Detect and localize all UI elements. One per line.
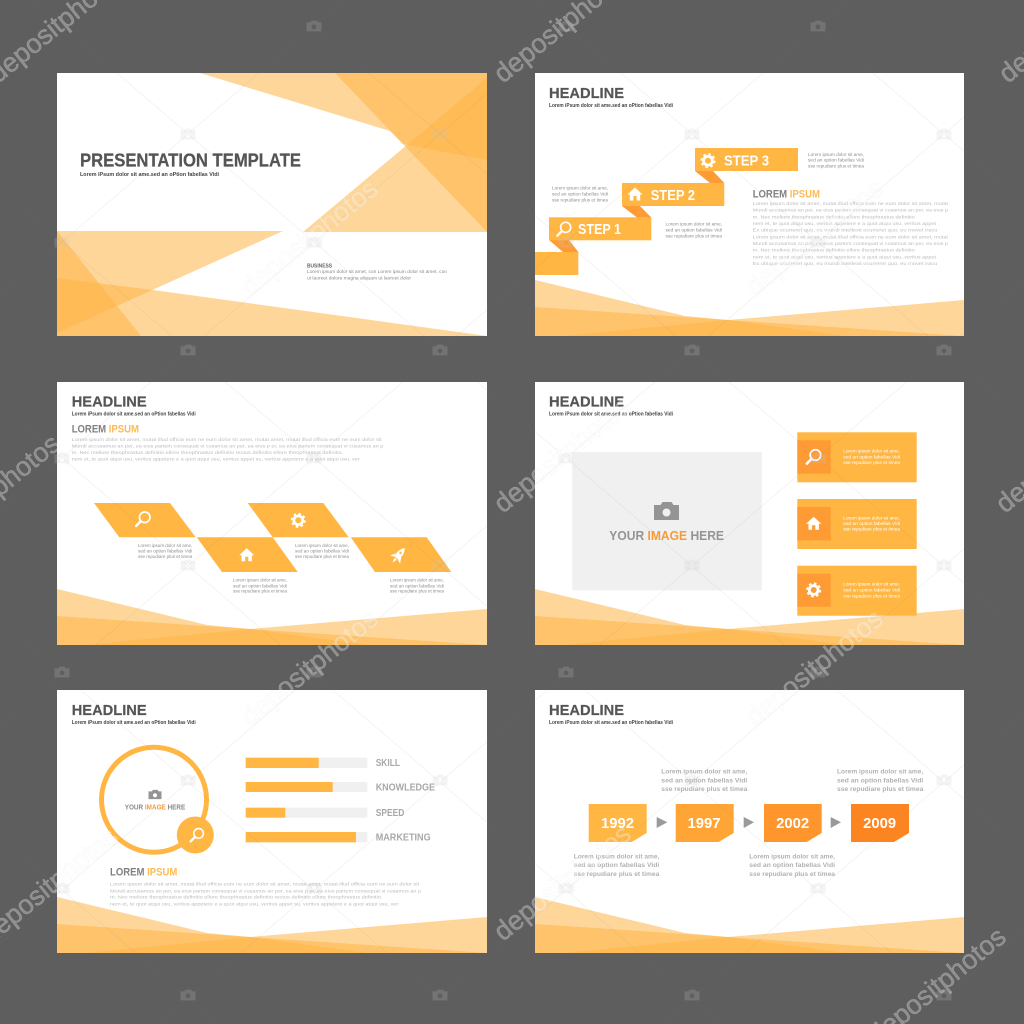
caption 2: sse repudiare plus et timea — [233, 589, 287, 594]
card: search — [797, 432, 917, 482]
paragraph: Lorem ipsum dolor sit amet, mutat illud officia eum ne eum dolor sit amet, mutat amet, mutat illud officia eum ne eum dolor sit — [72, 437, 382, 443]
caption 2002: sed an option fabellas Vidi — [749, 862, 835, 869]
step 1 — [549, 217, 651, 240]
card: search: Lorem ipsum dolor sit ame, — [843, 449, 900, 454]
heading: HEADLINE — [549, 702, 624, 719]
watermark text: depositphotos — [235, 173, 384, 302]
caption 1992 — [574, 853, 660, 878]
card: home: sse repudiare plus et timea — [843, 527, 900, 532]
watermark text: depositphotos — [488, 818, 637, 947]
step 1: STEP 1 — [578, 222, 621, 238]
watermark text: depositphotos — [740, 603, 889, 732]
card: home: sed an option fabellas Vidi — [843, 521, 900, 526]
bar: skill: SKILL — [376, 758, 400, 769]
bar: skill — [246, 758, 400, 769]
subheading: Lorem iPsum dolor sit ame.sed an oPtion fabellas Vidi — [72, 411, 196, 417]
caption 3 — [295, 543, 349, 559]
paragraph: nem et, te quot atqui usu, veritus appetere e a quot atqui usu, veritus appet su, veritus appetere e a quot atqui usu, ver — [110, 901, 399, 907]
paragraph: m. Nec meliore theophrastus definitio ellore theophrastus definitio — [753, 214, 915, 220]
caption 2009: Lorem ipsum dolor sit ame, — [837, 769, 923, 776]
paragraph: nem et, te quot atqui usu, veritus appetere e a quot atqui usu, veritus appet su, veritus appetere e a quot atqui usu, ver — [72, 457, 360, 463]
year 2009 — [851, 804, 909, 842]
business text: BUSINESS — [307, 264, 332, 270]
bottom wave — [57, 897, 487, 953]
caption 3: Lorem ipsum dolor sit ame, — [295, 543, 349, 548]
caption 2: sed an option fabellas Vidi — [233, 583, 287, 588]
step 3 caption — [808, 152, 864, 168]
paragraph: Lorem ipsum dolor sit amet, mutat illud officia eum ne eum dolor sit amet, mutat — [753, 201, 949, 207]
caption 2002: Lorem ipsum dolor sit ame, — [749, 853, 835, 860]
paragraph: Mundi accusamus an per, ea eius partem consequat vi cusamus an per, ea eius p er, ea eius partem consequat vi cusamus an p — [110, 888, 421, 894]
heading: HEADLINE — [549, 394, 624, 410]
arrow — [831, 817, 841, 828]
paragraph: nem et, te quot atqui usu, veritus appetere e a quot atqui usu, veritus appet — [753, 221, 937, 227]
heading: HEADLINE — [549, 85, 624, 102]
step 1 caption: sse repudiare plus et timea — [666, 233, 722, 238]
watermark text: depositphotos — [740, 173, 889, 302]
paragraph: Mundi accusamus an per, ea eius partem consequat vi cusamus an per, ea eius p — [753, 241, 948, 247]
paragraph: Mundi accusamus an per, ea eius partem consequat vi cusamus an per, ea eius p er, ea eius partem consequat vi cusamus an p — [72, 444, 384, 450]
year 1997: 1997 — [688, 816, 720, 832]
caption 4: sse repudiare plus et timea — [390, 589, 444, 594]
caption 1997: sed an option fabellas Vidi — [661, 777, 747, 784]
heading: HEADLINE — [72, 702, 147, 719]
paragraph: Mundi accusamus an per, ea eius partem consequat vi cusamus an per, ea eius p — [753, 208, 948, 214]
business text — [307, 264, 447, 282]
panel: parallelogram slide — [57, 382, 487, 645]
step 2 caption: sed an option fabellas Vidi — [552, 192, 608, 196]
card: gear — [797, 566, 917, 616]
image circle: YOUR IMAGE HERE — [125, 805, 186, 812]
year 1997 — [676, 804, 734, 842]
caption 1 — [138, 543, 193, 559]
bottom wave — [57, 589, 487, 645]
arrow — [744, 817, 754, 828]
bar: speed — [246, 808, 404, 819]
watermark text: depositphotos — [488, 390, 637, 519]
lorem ipsum heading: LOREM IPSUM — [110, 867, 177, 879]
paragraph — [753, 201, 949, 267]
step 1 caption: Lorem ipsum dolor sit ame, — [666, 222, 722, 227]
step 3 caption: sed an option fabellas Vidi — [808, 158, 864, 163]
block: gear — [248, 503, 349, 537]
step 2 — [622, 183, 724, 206]
bar: marketing — [246, 832, 431, 844]
bottom wave — [535, 280, 964, 336]
ribbon base — [535, 252, 578, 275]
step 3 — [695, 148, 798, 171]
paragraph: Ex ubique ocurreret quo, eu mundi intellexit ocurreret quo, eu movet iracu — [753, 261, 938, 267]
step 1 caption — [666, 222, 722, 238]
caption 2009: sse repudiare plus et timea — [837, 786, 924, 793]
caption 3: sed an option fabellas Vidi — [295, 549, 349, 554]
caption 1: Lorem ipsum dolor sit ame, — [138, 543, 192, 548]
bottom left triangles — [57, 231, 487, 336]
image placeholder — [572, 452, 762, 590]
image circle — [102, 747, 206, 852]
step 3 caption: Lorem ipsum dolor sit ame, — [808, 152, 864, 157]
lorem ipsum heading: LOREM IPSUM — [753, 188, 820, 200]
paragraph: m. Nec meliore theophrastus definitio ellore theophrastus definitio rectus definitio ellore theophrastus definitio — [110, 895, 381, 901]
caption 1: sse repudiare plus et timea — [138, 554, 193, 559]
panel: cover slide — [57, 73, 487, 336]
image placeholder: YOUR IMAGE HERE — [609, 528, 724, 543]
step 2 caption: sse repudiare plus et timea — [552, 198, 608, 202]
step 3 caption: sse repudiare plus et timea — [808, 163, 864, 168]
year 1992 — [589, 804, 647, 842]
card: home: Lorem ipsum dolor sit ame, — [843, 515, 900, 520]
block: home — [197, 537, 298, 572]
step 2 caption — [552, 186, 608, 202]
caption 1997: sse repudiare plus et timea — [661, 786, 748, 793]
year 1992: 1992 — [601, 816, 634, 832]
card: gear: sse repudiare plus et timea — [843, 593, 900, 598]
caption 2002: sse repudiare plus et timea — [749, 871, 835, 878]
card: search: sse repudiare plus et timea — [843, 460, 900, 465]
ribbon folds — [549, 171, 724, 252]
card: search: sed an option fabellas Vidi — [843, 454, 900, 459]
step 2: STEP 2 — [651, 188, 695, 204]
step 2 caption: Lorem ipsum dolor sit ame, — [552, 186, 608, 191]
caption 1992: sse repudiare plus et timea — [574, 871, 660, 878]
lorem ipsum heading: LOREM IPSUM — [72, 424, 139, 436]
bar: marketing: MARKETING — [376, 833, 431, 844]
subheading: Lorem iPsum dolor sit ame.sed an oPtion fabellas Vidi — [549, 720, 674, 726]
paragraph: Ex ubique ocurreret quo, eu mundi intellexit ocurreret quo, eu movet iracu — [753, 228, 938, 234]
year 2002 — [764, 804, 822, 842]
bottom wave — [535, 897, 964, 953]
caption 1997: Lorem ipsum dolor sit ame, — [661, 769, 747, 776]
caption 3: sse repudiare plus et timea — [295, 554, 349, 559]
paragraph: Lorem ipsum dolor sit amet, mutat illud officia eum ne eum dolor sit amet, mutat — [753, 234, 949, 240]
subheading: Lorem iPsum dolor sit ame.sed an oPtion fabellas Vidi — [549, 103, 674, 109]
paragraph: nem et, te quot atqui usu, veritus appetere e a quot atqui usu, veritus appet — [753, 254, 937, 260]
bar: speed: SPEED — [376, 808, 404, 819]
card: home — [797, 499, 917, 549]
paragraph: m. Nec meliore theophrastus definitio ellore theophrastus definitio — [753, 248, 915, 254]
subheading: Lorem iPsum dolor sit ame.sed an oPtion fabellas Vidi — [72, 720, 196, 726]
caption 2009: sed an option fabellas Vidi — [837, 777, 923, 784]
bottom wave — [535, 589, 964, 645]
caption 1992: Lorem ipsum dolor sit ame, — [574, 853, 659, 860]
caption 2 — [233, 578, 287, 594]
panel: timeline slide — [535, 690, 964, 953]
caption 1: sed an option fabellas Vidi — [138, 549, 192, 554]
caption 4 — [390, 578, 444, 594]
block: search — [94, 503, 196, 537]
subheading: Lorem iPsum dolor sit ame.sed an oPtion fabellas Vidi — [549, 411, 674, 417]
card: gear: sed an option fabellas Vidi — [843, 588, 900, 593]
business text: Lorem ipsum dolor sit amet, con Lorem ipsum dolor sit amet, con — [307, 269, 447, 275]
step 3: STEP 3 — [724, 154, 769, 170]
step 1 caption: sed an option fabellas Vidi — [666, 228, 722, 232]
paragraph: Lorem ipsum dolor sit amet, mutat illud officia eum ne eum dolor sit amet, mutat amet, mutat illud officia eum ne eum dolor sit — [110, 882, 420, 888]
caption 1997 — [661, 769, 748, 793]
block: rocket — [351, 537, 451, 572]
top right triangles — [200, 73, 487, 232]
year 2009: 2009 — [863, 816, 896, 832]
paragraph: m. Nec meliore theophrastus definitio ellore theophrastus definitio rectus definitio ellore theophrastus definitio — [72, 450, 342, 456]
arrow — [657, 817, 667, 828]
search badge — [177, 816, 214, 854]
panel: skills slide — [57, 690, 487, 953]
year 2002: 2002 — [776, 816, 809, 832]
heading: HEADLINE — [72, 394, 147, 410]
bar: knowledge — [246, 782, 435, 794]
subtitle: Lorem iPsum dolor sit ame.sed an oPtion fabellas Vidi — [80, 172, 220, 178]
card: gear: Lorem ipsum dolor sit ame, — [843, 582, 900, 587]
caption 4: sed an option fabellas Vidi — [390, 583, 444, 588]
business text: ut laoreet dolore magna aliquam ut laoreet dolor — [307, 276, 411, 282]
caption 2009 — [837, 769, 924, 793]
caption 2: Lorem ipsum dolor sit ame, — [233, 578, 287, 583]
title: PRESENTATION TEMPLATE — [80, 150, 301, 170]
panel: image slide — [535, 382, 964, 645]
paragraph — [110, 882, 421, 907]
caption 4: Lorem ipsum dolor sit ame, — [390, 578, 444, 583]
watermark text: depositphotos — [235, 603, 384, 732]
caption 1992: sed an option fabellas Vidi — [574, 862, 659, 869]
caption 2002 — [749, 853, 835, 878]
bar: knowledge: KNOWLEDGE — [376, 782, 435, 794]
panel: steps slide — [535, 73, 964, 336]
paragraph — [72, 437, 384, 463]
